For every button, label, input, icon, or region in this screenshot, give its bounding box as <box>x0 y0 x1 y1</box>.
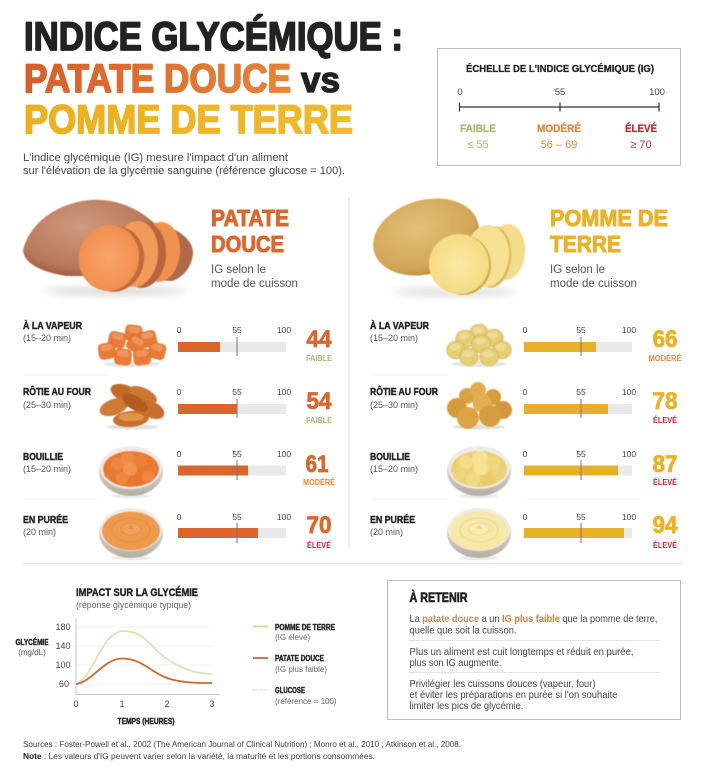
subheading: pomme de terre: mode de cuisson <box>550 278 637 290</box>
panel: IG scale <box>438 48 680 166</box>
bar 94 <box>523 512 636 543</box>
row: pomme vapeur <box>370 319 682 367</box>
bar 87: 55 <box>576 449 586 459</box>
scale axis: 100 <box>649 87 665 98</box>
y axis title: (mg/dL) <box>18 648 46 657</box>
value 87: 87 <box>652 451 678 478</box>
label: (25–30 min) <box>23 400 71 410</box>
bar 44: 100 <box>277 325 291 335</box>
intro text <box>23 152 345 177</box>
row: pomme four <box>370 382 678 430</box>
label: (15–20 min) <box>23 333 71 343</box>
row: patate vapeur <box>23 319 333 367</box>
title <box>24 15 403 142</box>
bar 66: 100 <box>622 325 636 335</box>
point 3: limiter les pics de glycémie. <box>410 701 524 712</box>
x axis labels: 2 <box>164 699 170 709</box>
panel: à retenir <box>388 580 680 720</box>
bar 54: 100 <box>277 387 291 397</box>
subheading: pomme de terre: IG selon le <box>550 264 605 276</box>
value 66: 66 <box>652 326 678 353</box>
label <box>23 452 71 474</box>
value 54: 54 <box>306 388 332 415</box>
label <box>370 319 430 343</box>
label: (20 min) <box>370 527 403 537</box>
bar 61: 0 <box>177 449 182 459</box>
heading: pomme de terre: POMME DE <box>550 205 668 231</box>
bar 54: 0 <box>177 387 182 397</box>
label: À LA VAPEUR <box>23 319 83 332</box>
scale: faible: FAIBLE <box>460 123 496 135</box>
y axis labels <box>55 622 71 689</box>
value 61: MODÉRÉ <box>303 478 336 487</box>
scale axis <box>457 87 665 112</box>
bar 94: 0 <box>523 512 528 522</box>
label: EN PURÉE <box>370 513 415 526</box>
bar 78: 0 <box>523 387 528 397</box>
bar 54: 55 <box>232 387 242 397</box>
y axis labels: 180 <box>55 622 71 632</box>
chart heading: (réponse glycémique typique) <box>76 600 191 610</box>
chart legend: GLUCOSE <box>275 686 306 695</box>
value 70 <box>306 512 332 550</box>
scale: élevé: ÉLEVÉ <box>625 122 657 135</box>
value 66: MODÉRÉ <box>648 354 682 363</box>
label <box>370 385 439 410</box>
intro text: sur l'élévation de la glycémie sanguine (référence glucose = 100). <box>23 165 345 177</box>
point 2: plus son IG augmente. <box>410 658 502 669</box>
bar 61 <box>177 449 291 480</box>
value 61 <box>303 451 336 487</box>
value 78: 78 <box>652 388 678 415</box>
label <box>370 513 415 537</box>
bar 44: 0 <box>177 325 182 335</box>
line chart <box>16 618 220 726</box>
bar 61: 55 <box>232 449 242 459</box>
label <box>23 385 92 410</box>
subheading: pomme de terre <box>550 264 637 290</box>
label: (15–20 min) <box>23 464 71 474</box>
label: EN PURÉE <box>23 513 68 526</box>
x axis labels: 3 <box>209 699 215 709</box>
bar 66: 55 <box>576 325 586 335</box>
icon: roasted potatoes <box>447 382 512 430</box>
value 87: ÉLEVÉ <box>653 478 678 487</box>
bar 70 <box>177 512 291 543</box>
point 1 <box>410 614 658 636</box>
chart legend: (IG élevé) <box>275 633 310 642</box>
icon: steamed potato pieces <box>446 324 512 367</box>
icon: sweet potato <box>23 200 193 297</box>
bar 78: 100 <box>622 387 636 397</box>
label: (15–20 min) <box>370 464 418 474</box>
row: pomme bouillie <box>370 446 678 498</box>
title: INDICE GLYCÉMIQUE : <box>24 15 403 59</box>
sources and note: Sources : Foster-Powell et al., 2002 (The American Journal of Clinical Nutrition) ; Monro et al., 2010 ; Atkinson et al., 2008. <box>23 739 461 749</box>
chart legend: PATATE DOUCE <box>275 654 325 663</box>
bar 94: 100 <box>622 512 636 522</box>
scale heading: ÉCHELLE DE L'INDICE GLYCÉMIQUE (IG) <box>466 62 654 75</box>
x axis labels <box>73 699 215 709</box>
title: POMME DE TERRE <box>24 98 353 142</box>
icon: roasted sweet potato <box>97 380 167 430</box>
row: pomme purée <box>370 508 678 560</box>
bar 44: 55 <box>232 325 242 335</box>
label: (25–30 min) <box>370 400 418 410</box>
subheading: patate douce: IG selon le <box>211 264 266 276</box>
icon: bowl of mashed potato <box>447 508 511 560</box>
bar 70: 0 <box>177 512 182 522</box>
chart legend <box>253 623 337 706</box>
x axis title: TEMPS (HEURES) <box>118 716 175 726</box>
subheading: patate douce: mode de cuisson <box>211 278 298 290</box>
bar 61: 100 <box>277 449 291 459</box>
heading: patate douce <box>211 205 289 257</box>
heading: patate douce: PATATE <box>211 205 289 231</box>
value 44: FAIBLE <box>306 354 333 363</box>
y axis labels: 60 <box>59 679 69 689</box>
icon: potato <box>364 187 527 296</box>
y axis title: GLYCÉMIE <box>16 638 49 647</box>
bar 78: 55 <box>576 387 586 397</box>
value 66 <box>648 326 682 363</box>
curve: pomme de terre <box>76 631 212 684</box>
bar 44 <box>177 325 291 356</box>
icon: bowl of mashed sweet potato <box>99 508 163 560</box>
bar 66: 0 <box>523 325 528 335</box>
subheading: patate douce <box>211 264 298 290</box>
point 3 <box>410 679 618 712</box>
sources and note <box>23 739 461 761</box>
y axis labels: 100 <box>55 660 71 670</box>
value 61: 61 <box>306 451 328 478</box>
y axis title <box>16 638 49 657</box>
label: RÔTIE AU FOUR <box>23 385 92 398</box>
scale: modéré: 56 – 69 <box>541 139 577 151</box>
intro text: L'indice glycémique (IG) mesure l'impact d'un aliment <box>23 152 288 164</box>
row: patate bouillie <box>23 446 336 498</box>
point 3: Privilégier les cuissons douces (vapeur, four) <box>410 679 596 690</box>
heading: pomme de terre: TERRE <box>550 231 621 257</box>
label: (15–20 min) <box>370 333 418 343</box>
value 78 <box>652 388 678 425</box>
label <box>23 513 68 537</box>
scale: modéré <box>537 122 581 151</box>
scale: faible <box>460 123 496 151</box>
bar 87 <box>523 449 636 480</box>
bar 66 <box>523 325 636 356</box>
icon: steamed sweet potato cubes <box>97 324 167 367</box>
bar 70: 55 <box>232 512 242 522</box>
bar 54 <box>177 387 291 418</box>
bar 87: 100 <box>622 449 636 459</box>
chart heading: IMPACT SUR LA GLYCÉMIE <box>76 586 198 599</box>
sources and note: Note : Les valeurs d'IG peuvent varier selon la variété, la maturité et les portions consommées. <box>23 751 375 761</box>
value 54: FAIBLE <box>306 416 333 425</box>
chart heading <box>76 586 198 610</box>
chart legend: (IG plus faible) <box>275 665 327 674</box>
value 78: ÉLEVÉ <box>653 416 678 425</box>
value 70: 70 <box>306 512 332 539</box>
chart legend: (référence = 100) <box>275 697 337 706</box>
x axis labels: 0 <box>73 699 79 709</box>
icon: bowl of boiled potatoes <box>447 446 511 498</box>
bar 78 <box>523 387 636 418</box>
scale: faible: ≤ 55 <box>467 139 489 151</box>
icon: bowl of boiled sweet potato <box>99 446 163 498</box>
scale axis: 0 <box>457 87 463 98</box>
value 94: 94 <box>652 512 678 539</box>
x axis labels: 1 <box>119 699 125 709</box>
curve: patate douce <box>76 658 212 684</box>
bar 87: 0 <box>523 449 528 459</box>
value 44: 44 <box>306 326 332 353</box>
point 3: et éviter les préparations en purée si l'on souhaite <box>410 690 618 701</box>
point 2: Plus un aliment est cuit longtemps et réduit en purée, <box>410 647 634 658</box>
label: (20 min) <box>23 527 56 537</box>
y axis labels: 140 <box>55 641 71 651</box>
title: PATATE DOUCE <box>24 57 291 101</box>
value 94 <box>652 512 678 550</box>
heading: pomme de terre <box>550 205 668 257</box>
label <box>23 319 83 343</box>
column divider <box>348 197 350 548</box>
row: patate purée <box>23 508 332 560</box>
heading: À RETENIR <box>410 590 468 605</box>
row: patate four <box>23 380 333 430</box>
heading: patate douce: DOUCE <box>211 231 284 257</box>
label: BOUILLIE <box>23 452 63 463</box>
scale: élevé <box>625 122 657 151</box>
bar 94: 55 <box>576 512 586 522</box>
point 1: La patate douce a un IG plus faible que la pomme de terre, <box>410 614 658 625</box>
label: BOUILLIE <box>370 452 410 463</box>
point 2 <box>410 647 634 669</box>
scale: élevé: ≥ 70 <box>630 139 652 151</box>
scale: modéré: MODÉRÉ <box>537 122 581 135</box>
value 94: ÉLEVÉ <box>653 541 678 550</box>
scale axis: 55 <box>555 87 565 98</box>
title: vs <box>301 59 340 100</box>
label <box>370 452 418 474</box>
value 70: ÉLEVÉ <box>307 541 332 550</box>
bar 70: 100 <box>277 512 291 522</box>
label: À LA VAPEUR <box>370 319 430 332</box>
point 1: quelle que soit la cuisson. <box>410 626 516 636</box>
chart legend: POMME DE TERRE <box>275 623 336 632</box>
label: RÔTIE AU FOUR <box>370 385 439 398</box>
